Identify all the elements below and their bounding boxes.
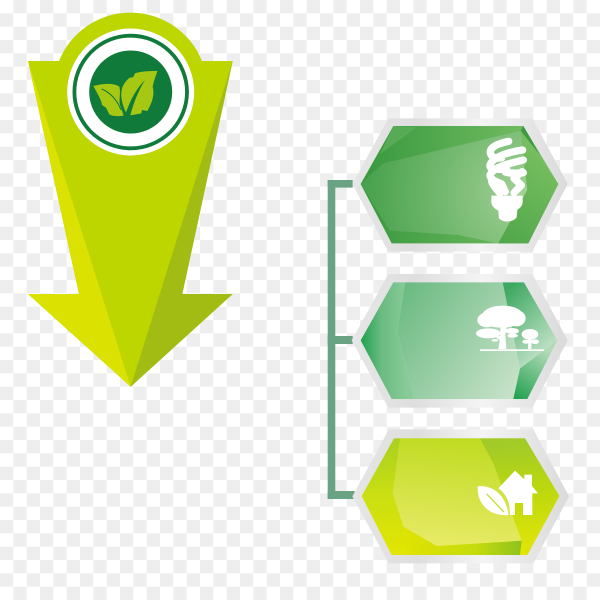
hexagon green base [361, 126, 558, 243]
arrow top arch [59, 13, 202, 61]
right facet [498, 131, 558, 243]
right facet [503, 282, 557, 368]
hexagon yellow base [362, 438, 559, 555]
icon: two leaves [93, 71, 157, 116]
icon: light bulb [490, 141, 523, 193]
badge white disc [67, 28, 194, 156]
hexagon silver rim [352, 118, 568, 252]
central light facet [361, 131, 527, 243]
top right dark facet [521, 126, 540, 155]
right facet [480, 438, 559, 555]
top left lighter facet [380, 126, 417, 154]
badge dark disc [89, 50, 172, 134]
arrow left facet [28, 61, 131, 387]
central light facet [393, 438, 522, 546]
bottom facet [403, 527, 522, 555]
icon: leaf and house [478, 471, 538, 515]
panel: home hexagon [352, 429, 569, 563]
central facet [397, 282, 520, 399]
hexagon silver rim [352, 274, 568, 408]
icon: trees [476, 306, 544, 351]
left facet [361, 282, 414, 399]
leaf badge [67, 28, 194, 156]
arrow central facet [28, 61, 233, 387]
arrow pointing down [28, 13, 233, 387]
hexagon silver rim [352, 429, 569, 563]
connector bracket [328, 180, 355, 499]
panel: nature hexagon [352, 274, 568, 408]
arrow right facet [131, 61, 233, 387]
bottom right facet [513, 340, 557, 399]
badge dark ring [74, 36, 187, 148]
panel: energy hexagon [352, 118, 568, 252]
